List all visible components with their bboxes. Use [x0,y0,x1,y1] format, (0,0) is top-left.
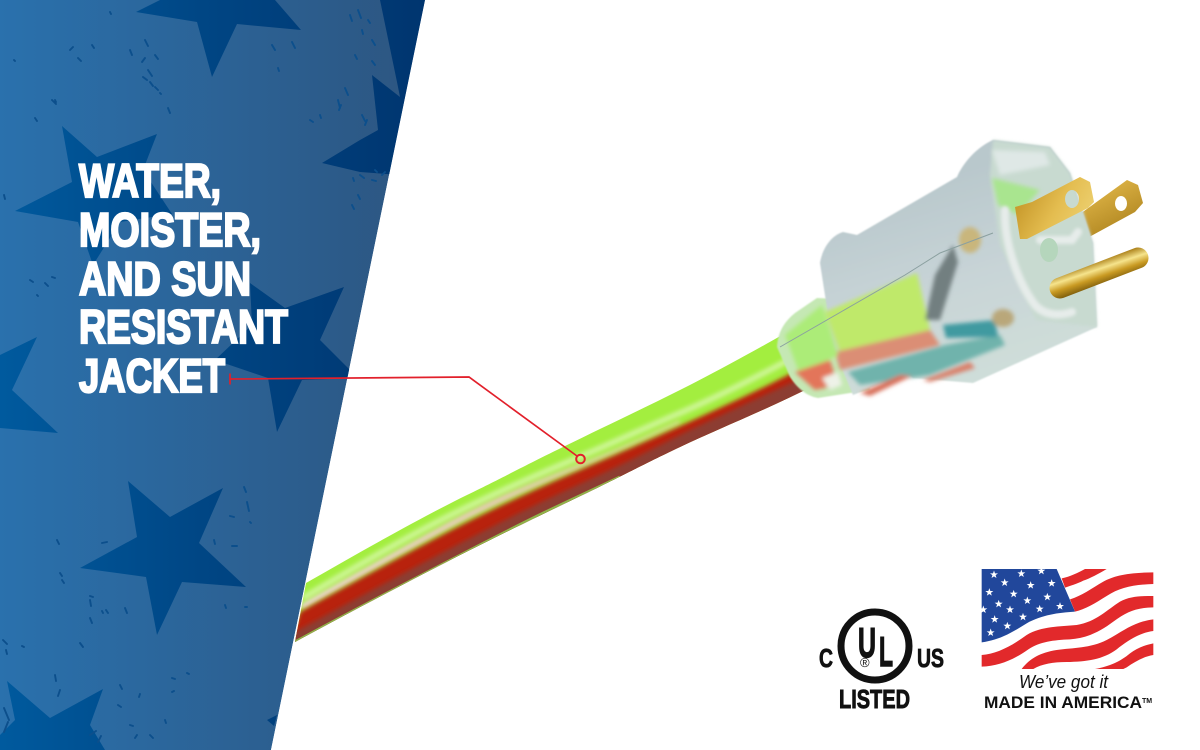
plug body [820,140,1097,395]
line 2: MOISTER, [79,203,261,256]
ground pin [1060,258,1138,288]
trademark: TM [1142,698,1152,705]
top screw [959,227,981,253]
line 4: RESISTANT [79,300,288,353]
cable pale stripe border [302,422,680,607]
letter U: U [858,619,876,666]
dark smudge [925,245,958,320]
plug internal wires [785,150,1050,396]
plug seam [780,233,993,347]
red wire [835,330,940,370]
cable [295,336,804,642]
lower screw [992,309,1014,327]
cable highlight [303,354,800,598]
back blade [1073,180,1143,242]
teal wire [848,335,1005,385]
upper face highlight [992,150,1050,175]
headline [79,154,288,402]
cable green base [295,336,803,642]
made in America caption [984,672,1152,712]
second lower red wire [923,362,975,382]
panel: blue star background [0,0,430,750]
distressed speckles [4,10,385,296]
line 5: JACKET [79,349,225,402]
made in America: MADE IN AMERICA [984,694,1142,712]
letter c: C [819,643,833,673]
tagline: We’ve got it [1019,672,1109,692]
top green tint [992,178,1040,215]
lower red in collar [795,360,838,390]
cable lower green edge [295,477,620,642]
UL listed logo [819,612,944,714]
line 1: WATER, [79,154,221,207]
plug face ring [1005,210,1078,314]
teal core [943,320,998,338]
letters US: US [917,643,944,673]
American flag [979,567,1153,669]
plug face tint [990,140,1097,327]
cable red jacket stripe [295,372,804,642]
ground hole [1040,238,1058,262]
stars [979,567,1064,636]
red stripes [982,569,1153,669]
plug [777,140,1143,398]
plug strain relief [777,298,870,398]
green wire [825,273,930,353]
collar green [785,305,838,375]
front blade [1015,177,1094,239]
cable dark underside [295,381,803,642]
registered mark: ® [860,655,870,670]
line 3: AND SUN [79,252,251,305]
faded stars [0,0,430,750]
listed label: LISTED [839,684,910,714]
lower red wire [860,375,912,396]
UL ring [841,612,909,680]
pale window in collar [822,372,842,390]
letter L: L [879,628,893,675]
canton [982,569,1075,642]
callout leader line [230,374,585,463]
